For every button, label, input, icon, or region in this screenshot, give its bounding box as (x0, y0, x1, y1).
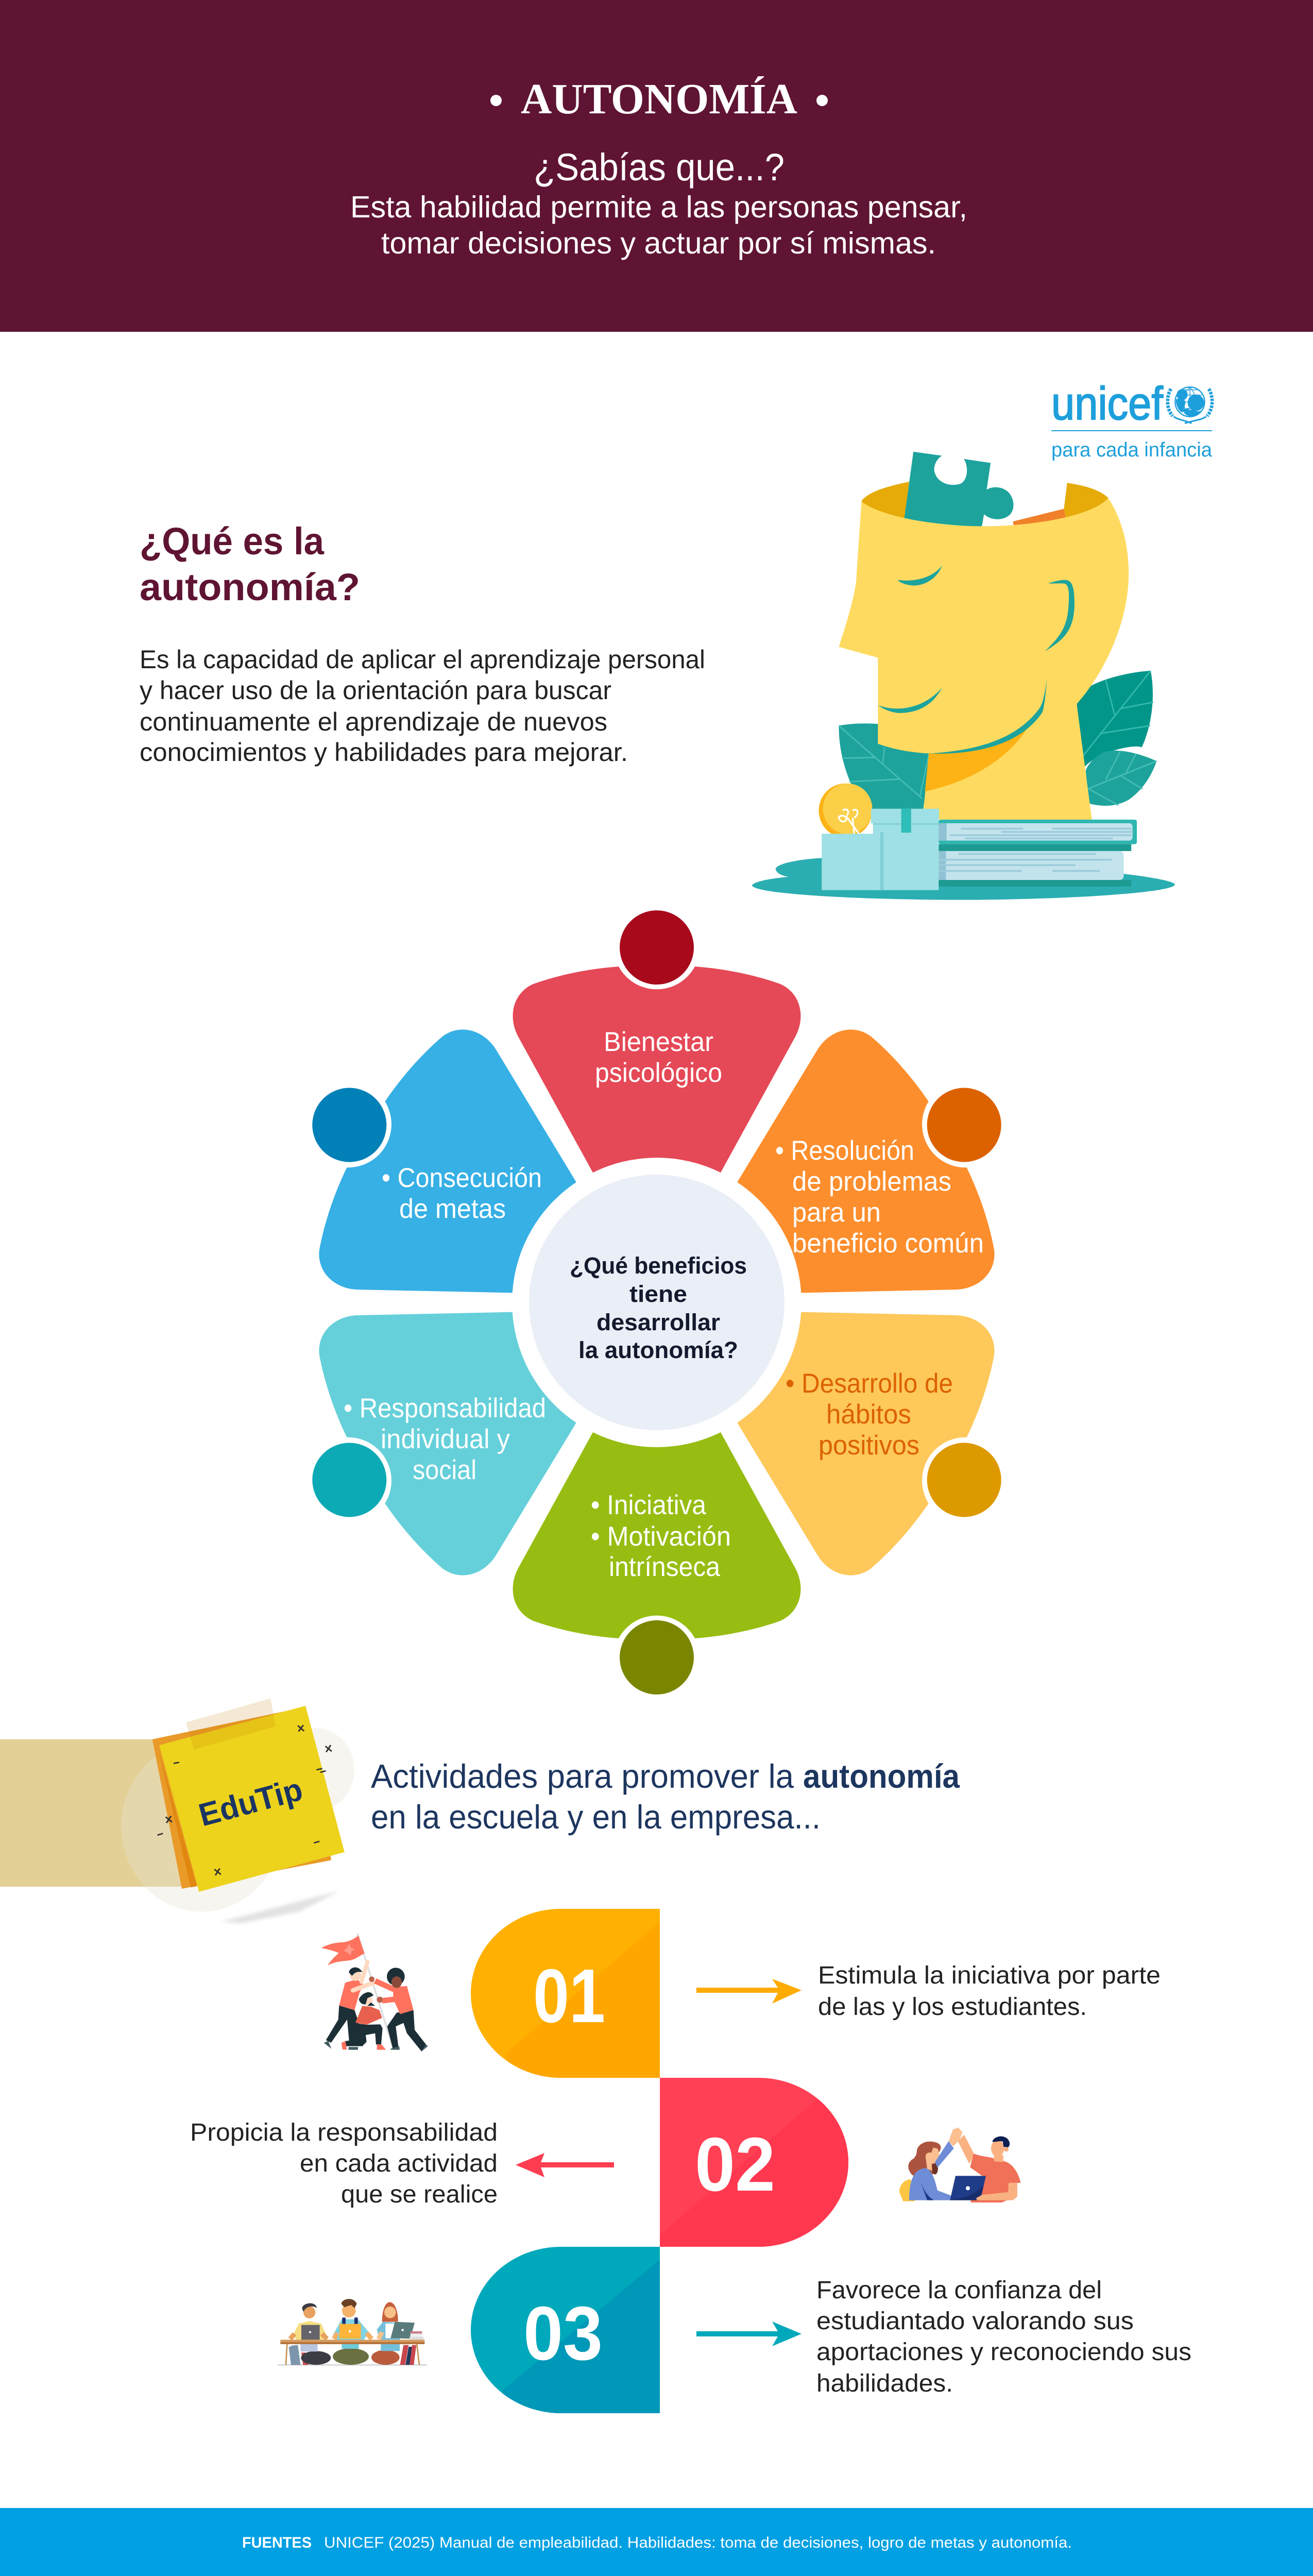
label: resolucion (775, 1136, 984, 1259)
petal: responsabilidad (245, 1243, 616, 1623)
sources band (0, 2508, 1313, 2576)
face lines (878, 566, 1075, 754)
leaf right (1077, 671, 1156, 806)
text: step 01 (818, 1962, 1161, 2021)
label: responsabilidad (344, 1393, 546, 1485)
center question: desarrollar (596, 1309, 720, 1335)
label: iniciativa (591, 1490, 731, 1582)
label: resolucion: de problemas (792, 1166, 951, 1197)
header text: tomar decisiones y actuar por sí mismas. (381, 226, 936, 260)
label: bienestar (595, 1027, 722, 1088)
definition text (140, 645, 705, 767)
label: resolucion: para un (792, 1197, 881, 1228)
step 01: 01 (533, 1954, 605, 2039)
label: iniciativa: intrínseca (609, 1552, 720, 1582)
text: step 03: Favorece la confianza del (816, 2277, 1102, 2304)
leaf left (839, 723, 931, 816)
petal: resolucion (697, 982, 1068, 1362)
text: step 02: en cada actividad (300, 2150, 498, 2177)
subtitle: ¿Sabías que...? (534, 146, 785, 189)
label: resolucion: • Resolución (775, 1136, 914, 1166)
header band (0, 0, 1313, 332)
logo: unicef: para cada infancia (1051, 439, 1212, 461)
petal: bienestar (513, 910, 800, 1173)
step 02 (660, 2078, 855, 2251)
heading: activities: en la escuela y en la empresa... (371, 1798, 821, 1836)
logo: unicef (1051, 378, 1212, 461)
ground (752, 858, 1175, 900)
puzzle piece (904, 452, 1013, 527)
chart: benefits wheel (245, 910, 1068, 1694)
box (822, 809, 939, 890)
heading (140, 520, 360, 608)
heading: activities: autonomía (803, 1757, 960, 1795)
label: bienestar: psicológico (595, 1058, 722, 1088)
sources band: UNICEF (2025) Manual de empleabilidad. Habilidades: toma de decisiones, logro de metas y autonomía. (324, 2534, 1072, 2551)
sources band: FUENTES (242, 2534, 312, 2551)
petal: consecucion (245, 982, 616, 1362)
label: responsabilidad: • Responsabilidad (344, 1393, 546, 1423)
petal: iniciativa (513, 1432, 800, 1694)
label: consecucion: de metas (399, 1194, 506, 1224)
label: consecucion: • Consecución (382, 1163, 542, 1193)
sticky note: EduTip (0, 1699, 354, 1923)
neck shadow (925, 724, 1030, 791)
label: bienestar: Bienestar (604, 1027, 713, 1057)
header text: Esta habilidad permite a las personas pensar, (350, 190, 967, 224)
label: habitos: positivos (819, 1430, 919, 1461)
books (939, 820, 1137, 887)
text: step 03 (816, 2277, 1191, 2397)
panel: what is autonomy (140, 520, 705, 767)
label: iniciativa: • Iniciativa (591, 1490, 706, 1520)
center question: la autonomía? (578, 1337, 738, 1363)
light bulb (819, 784, 872, 838)
text: step 03: estudiantado valorando sus (816, 2308, 1134, 2335)
header text (350, 190, 967, 260)
label: habitos (786, 1368, 953, 1461)
arrow: step 03 (696, 2321, 802, 2346)
label: resolucion: beneficio común (792, 1228, 984, 1259)
step 03: 03 (523, 2291, 603, 2376)
definition text: continuamente el aprendizaje de nuevos (140, 707, 607, 736)
heading: ¿Qué es la (140, 520, 325, 563)
arrow: step 01 (696, 1979, 802, 2004)
center question: tiene (629, 1281, 687, 1307)
definition text: Es la capacidad de aplicar el aprendizaje personal (140, 645, 705, 674)
brain interior (861, 482, 1109, 526)
heading: activities: Actividades para promover la (371, 1757, 794, 1795)
icon: unicef emblem (1168, 387, 1212, 423)
step 01 (471, 1909, 660, 2081)
label: habitos: hábitos (826, 1399, 911, 1430)
logo: unicef: unicef (1051, 378, 1164, 430)
label: responsabilidad: individual y (381, 1424, 510, 1454)
illustration: people raising flag (321, 1934, 428, 2052)
definition text: conocimientos y habilidades para mejorar. (140, 738, 628, 767)
illustration: high five (899, 2127, 1021, 2202)
sticky note: EduTip: EduTip (195, 1772, 306, 1834)
label: iniciativa: • Motivación (591, 1521, 731, 1552)
center question (570, 1252, 747, 1363)
illustration: head with puzzle (752, 452, 1175, 900)
text: step 01: de las y los estudiantes. (818, 1993, 1087, 2021)
step 03 (471, 2247, 660, 2416)
text: step 02: que se realice (341, 2181, 498, 2208)
illustration: students at table (278, 2299, 427, 2365)
label: habitos: • Desarrollo de (786, 1368, 953, 1399)
text: step 02 (190, 2119, 498, 2208)
definition text: y hacer uso de la orientación para buscar (140, 676, 611, 705)
step 02: 02 (695, 2122, 775, 2207)
head (839, 498, 1129, 820)
text: step 02: Propicia la responsabilidad (190, 2119, 498, 2146)
label: responsabilidad: social (413, 1455, 476, 1485)
center circle (529, 1175, 785, 1430)
arrow: step 02 (516, 2153, 614, 2177)
heading: autonomía? (140, 566, 360, 608)
text: step 03: aportaciones y reconociendo sus (816, 2338, 1191, 2366)
label: consecucion (382, 1163, 542, 1224)
center question: ¿Qué beneficios (570, 1252, 747, 1279)
text: step 01: Estimula la iniciativa por parte (818, 1962, 1161, 1989)
heading: activities (371, 1757, 960, 1836)
text: step 03: habilidades. (816, 2370, 953, 2397)
petal: habitos (697, 1243, 1068, 1623)
title: AUTONOMÍA (521, 75, 797, 123)
